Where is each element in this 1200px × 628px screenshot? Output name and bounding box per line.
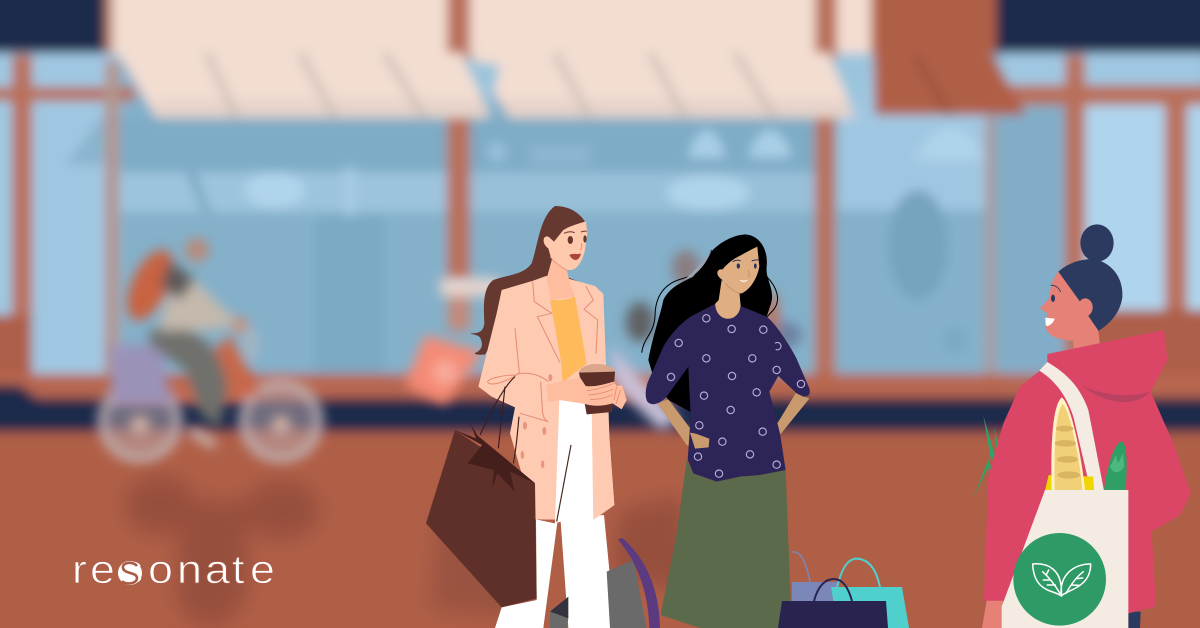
navy bag xyxy=(778,601,888,628)
blurred cyclist xyxy=(102,238,319,459)
grey corner xyxy=(550,612,568,628)
blurred bag and passer-by xyxy=(405,250,802,430)
skirt xyxy=(661,460,792,628)
coat lines xyxy=(488,282,598,422)
shopping bags at the foot of the second woman xyxy=(778,552,909,628)
camisole xyxy=(550,297,587,382)
blouse polka dots xyxy=(667,315,805,477)
teal bag xyxy=(831,587,909,628)
wordmark text: resonate xyxy=(72,547,275,591)
grey-blue handle xyxy=(792,552,810,582)
figure: woman in pink hoodie with tote bag xyxy=(973,224,1191,628)
hood shadow xyxy=(1082,385,1150,402)
pavement and sill xyxy=(0,374,1200,628)
trousers xyxy=(1128,612,1141,628)
coffee cup xyxy=(578,364,615,414)
logo: resonate wordmark xyxy=(72,547,275,591)
coat panel over trousers xyxy=(592,402,614,520)
figure: woman in navy polka-dot blouse and green skirt xyxy=(642,234,810,628)
window panes xyxy=(0,53,1200,375)
navy handle xyxy=(814,579,852,601)
tote bag xyxy=(1002,490,1128,628)
hair xyxy=(1058,259,1122,331)
fascia panels xyxy=(0,0,1200,80)
neck xyxy=(547,257,575,299)
tote strap xyxy=(1039,362,1104,491)
figure: woman in peach coat with brown shopping bag xyxy=(426,206,627,628)
ground base xyxy=(0,480,1200,628)
teal handle xyxy=(837,559,880,588)
awnings xyxy=(118,50,1026,118)
face xyxy=(717,247,759,293)
panniers and frame xyxy=(110,345,172,405)
hair xyxy=(648,234,772,413)
neck and face xyxy=(1040,272,1100,350)
arm and hand around cup xyxy=(546,377,627,409)
coat buttons xyxy=(521,374,552,468)
flowing hair strands xyxy=(642,250,778,353)
grey bag xyxy=(607,560,647,628)
shopping bag xyxy=(426,377,537,607)
ear xyxy=(1078,298,1093,316)
grey-blue bag xyxy=(792,582,838,612)
groceries xyxy=(1045,397,1127,491)
wheel hubs xyxy=(131,416,290,434)
grey hair strand xyxy=(683,250,712,280)
face details xyxy=(550,231,587,270)
neck xyxy=(715,280,741,325)
wheels xyxy=(102,383,319,459)
face xyxy=(544,221,587,270)
blurred ground shadows xyxy=(124,460,700,626)
logo swirl icon replacing the s xyxy=(118,561,142,585)
dark corner xyxy=(550,597,568,618)
hair xyxy=(470,206,587,355)
coat xyxy=(478,276,614,520)
tote emblem xyxy=(1013,533,1106,626)
face details xyxy=(725,260,759,294)
figure: grey bag fragment with purple strap xyxy=(550,538,660,628)
purple strap xyxy=(618,538,660,628)
hand on hip xyxy=(690,433,709,449)
blouse xyxy=(646,304,810,482)
window interiors xyxy=(65,118,1186,375)
pillars and frames xyxy=(0,55,1200,390)
arms xyxy=(657,393,809,449)
face details xyxy=(1045,285,1061,326)
trousers xyxy=(495,400,615,628)
hoodie xyxy=(984,330,1191,613)
plant leaves behind xyxy=(973,416,999,497)
hand xyxy=(982,601,1003,628)
pants crease xyxy=(557,445,571,522)
hair bun xyxy=(1080,224,1114,262)
